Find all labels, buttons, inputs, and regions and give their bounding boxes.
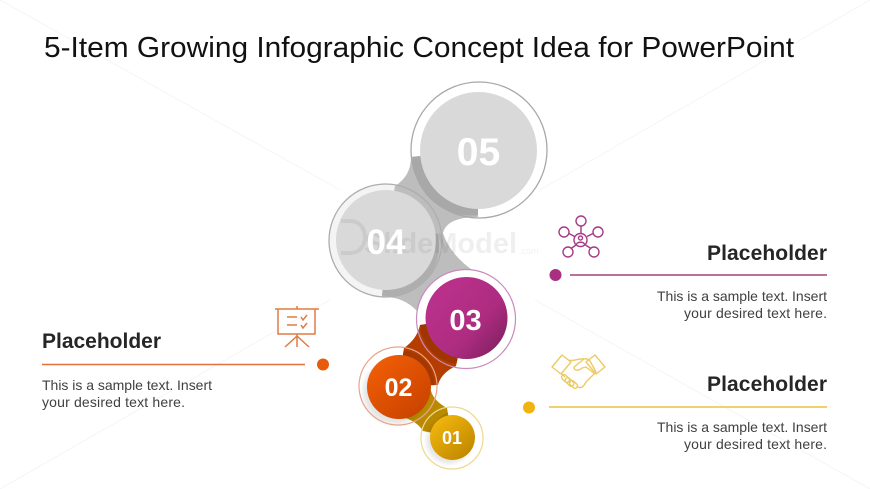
circle 04: 04 — [367, 223, 406, 262]
circle 01 — [421, 407, 483, 469]
panel: left placeholder — [42, 306, 329, 410]
icon: handshake — [552, 355, 605, 389]
watermark: SlideModel — [364, 228, 517, 260]
body text: your desired text here. — [684, 436, 827, 452]
dot — [550, 269, 562, 281]
icon: network — [559, 216, 603, 257]
connector: 05 to 04 — [386, 150, 478, 240]
heading: Placeholder — [42, 330, 161, 353]
circle 03: 03 — [449, 305, 482, 337]
body text: This is a sample text. Insert — [42, 377, 212, 393]
icon: presentation board — [275, 306, 319, 347]
watermark — [341, 221, 539, 260]
circle 05 — [411, 82, 547, 218]
connector: 04 to 03 — [382, 233, 475, 318]
circle 04 — [329, 184, 539, 297]
body text: This is a sample text. Insert — [657, 419, 827, 435]
circle 01: 01 — [442, 428, 462, 448]
growing connector bands — [329, 82, 547, 469]
line — [42, 364, 305, 366]
title: 5-Item Growing Infographic Concept Idea for PowerPoint — [44, 32, 794, 64]
panel: top right placeholder — [550, 216, 827, 321]
heading: Placeholder — [707, 373, 827, 396]
dot — [523, 402, 535, 414]
circle 05: 05 — [457, 131, 500, 174]
connector: 03 to 02 — [398, 318, 466, 386]
body text: This is a sample text. Insert — [657, 288, 827, 304]
line — [570, 274, 827, 276]
heading: Placeholder — [707, 242, 827, 265]
body text: your desired text here. — [42, 394, 185, 410]
dot — [317, 358, 329, 370]
line — [549, 406, 827, 408]
watermark: .com — [519, 246, 539, 256]
circle 02 — [359, 347, 437, 425]
circle 03 — [416, 270, 516, 368]
circle 02: 02 — [385, 374, 412, 402]
panel: bottom right placeholder — [523, 355, 827, 452]
body text: your desired text here. — [684, 305, 827, 321]
connector: 02 to 01 — [399, 387, 452, 437]
